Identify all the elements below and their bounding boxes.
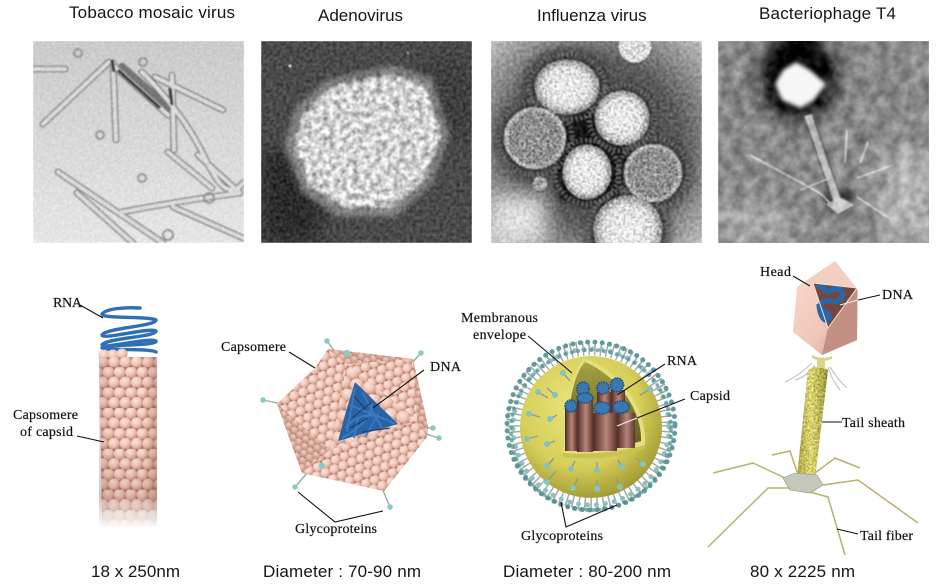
micrograph: influenza virus (491, 41, 702, 243)
label: capsomere of capsid (13, 408, 104, 442)
dimension: 80 x 2225 nm (750, 562, 855, 581)
capsid facets (277, 349, 428, 491)
rear RNA (577, 378, 624, 396)
RNA in capsid (565, 393, 629, 414)
title: Bacteriophage T4: Bacteriophage T4 (759, 4, 896, 23)
DNA core (338, 382, 398, 441)
label: glycoproteins: Glycoproteins (295, 522, 377, 537)
capsid tube (96, 348, 160, 529)
diagram: influenza virus (461, 311, 730, 581)
spikes ring (507, 342, 675, 510)
label: head: Head (760, 265, 791, 280)
label: RNA (617, 354, 698, 395)
label: capsid: Capsid (690, 389, 730, 404)
label: DNA (373, 360, 462, 408)
label: DNA: DNA (430, 360, 462, 375)
label: DNA: DNA (882, 288, 914, 303)
label: capsomere of capsid: Capsomere (13, 408, 78, 423)
label: glycoproteins (295, 492, 383, 537)
label: membranous envelope (461, 311, 572, 373)
micrograph: tobacco mosaic virus (33, 41, 244, 243)
micrograph: adenovirus (261, 41, 472, 243)
rear capsid tubes (597, 390, 625, 422)
diagram: bacteriophage T4 (708, 261, 918, 581)
dimension: 18 x 250nm (91, 562, 180, 581)
label: capsomere (221, 340, 315, 368)
envelope sphere (520, 356, 662, 498)
label: tail fiber: Tail fiber (860, 529, 913, 544)
whiskers (785, 363, 847, 390)
dimension: Diameter : 70-90 nm (263, 562, 421, 581)
RNA coil (102, 308, 156, 352)
label: DNA (840, 288, 914, 305)
title: Adenovirus: Adenovirus (318, 6, 403, 25)
front glycoproteins (524, 370, 653, 492)
micrograph: bacteriophage T4 (718, 36, 940, 245)
label: head (760, 265, 810, 286)
dimension: Diameter : 80-200 nm (503, 562, 671, 581)
tail sheath (797, 367, 828, 481)
label: RNA: RNA (53, 296, 83, 311)
label: tail fiber (837, 529, 913, 544)
title: Influenza virus: Influenza virus (537, 6, 647, 25)
label: tail sheath: Tail sheath (842, 416, 905, 431)
label: RNA: RNA (667, 354, 698, 369)
diagram: tobacco mosaic virus (13, 296, 180, 581)
capsid tubes (565, 397, 635, 452)
label: membranous envelope: Membranous (461, 311, 538, 326)
glycoprotein spikes (260, 338, 442, 510)
title: Tobacco mosaic virus: Tobacco mosaic virus (69, 3, 235, 22)
diagram: adenovirus (221, 338, 462, 581)
collar (812, 355, 832, 368)
label: RNA (53, 296, 103, 318)
label: membranous envelope: envelope (473, 328, 526, 343)
label: capsomere of capsid: of capsid (20, 425, 73, 440)
cutaway (563, 358, 645, 458)
label: glycoproteins: Glycoproteins (521, 529, 603, 544)
base plate (783, 473, 823, 493)
head (793, 261, 858, 355)
label: glycoproteins (521, 502, 617, 544)
label: capsid (617, 389, 730, 426)
label: capsomere: Capsomere (221, 340, 286, 355)
tail fibers (708, 451, 918, 555)
